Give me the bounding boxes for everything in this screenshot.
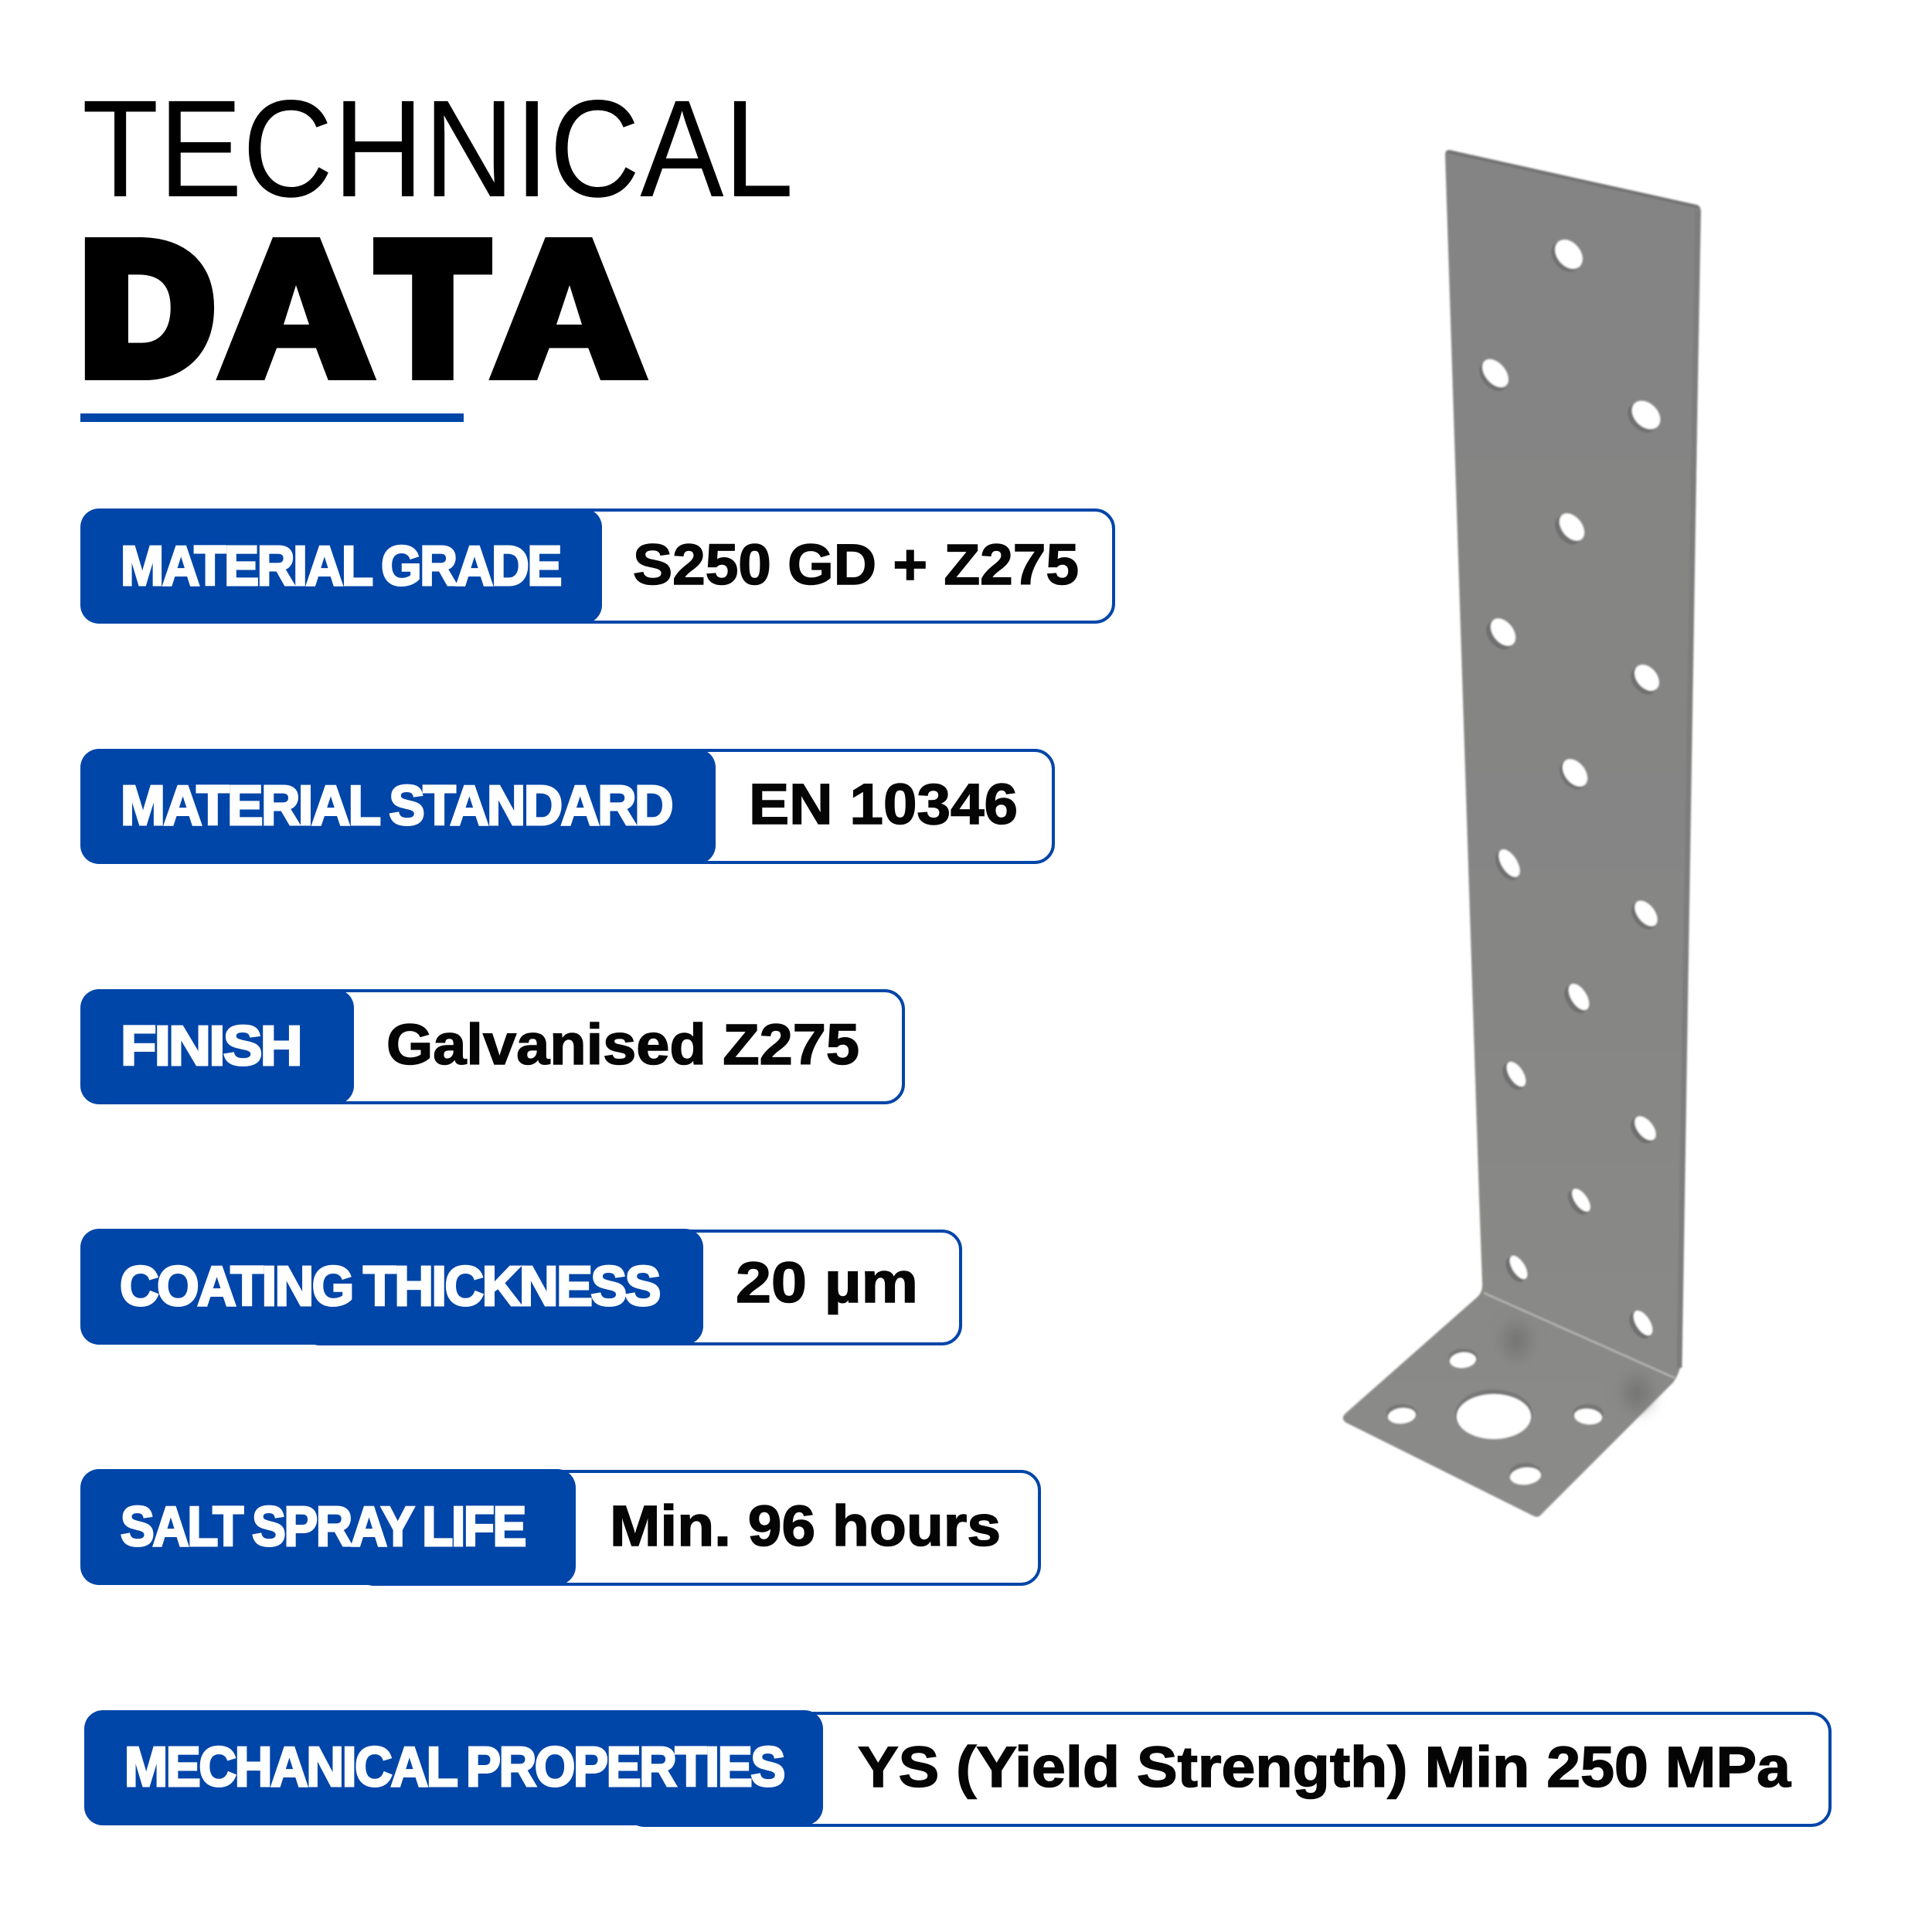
row: mechanical properties — [84, 1710, 1830, 1825]
hole shadows on foot — [1386, 1349, 1604, 1483]
holes on foot — [1387, 1351, 1603, 1486]
label text: FINISH — [121, 1015, 301, 1077]
row: material grade — [80, 509, 1114, 624]
value outline — [665, 750, 1053, 862]
holes on vertical plate — [1478, 234, 1665, 1338]
label text: MECHANICAL PROPERTIES — [124, 1736, 784, 1798]
title: TECHNICAL: TECHNICAL — [82, 71, 794, 226]
right edge shading — [1679, 210, 1698, 1368]
value outline — [301, 1231, 961, 1344]
value text: EN 10346 — [749, 772, 1018, 836]
label pill — [80, 989, 354, 1104]
bend crease — [1484, 1293, 1675, 1378]
title: DATA — [85, 237, 649, 380]
value outline — [541, 510, 1114, 622]
label pill — [80, 509, 602, 624]
label text: MATERIAL GRADE — [121, 536, 560, 597]
label text: SALT SPRAY LIFE — [121, 1496, 525, 1558]
value text: S250 GD + Z275 — [633, 532, 1079, 597]
product image: angle bracket — [1343, 150, 1701, 1517]
title: DATA: A — [224, 206, 369, 411]
title: DATA: T — [379, 206, 486, 411]
label pill — [84, 1710, 823, 1825]
row: coating thickness — [80, 1229, 961, 1345]
value outline — [626, 1713, 1830, 1825]
value text: Galvanised Z275 — [386, 1012, 859, 1077]
value outline — [309, 991, 903, 1103]
label pill — [80, 1469, 576, 1585]
title: DATA: D — [81, 206, 213, 411]
value text: 20 µm — [736, 1250, 918, 1315]
top edge shading — [1447, 151, 1699, 207]
hole shadows on vertical plate — [1474, 236, 1662, 1342]
label pill — [80, 1229, 703, 1345]
title: DATA: A — [497, 206, 641, 411]
title underline — [80, 413, 464, 422]
smudges on foot — [1504, 1324, 1649, 1410]
value text: YS (Yield Strength) Min 250 MPa — [858, 1735, 1791, 1799]
value text: Min. 96 hours — [610, 1494, 1001, 1558]
row: salt spray life — [80, 1469, 1039, 1585]
label pill — [80, 749, 716, 864]
value outline — [355, 1471, 1039, 1584]
row: material standard — [80, 749, 1053, 864]
label text: COATING THICKNESS — [120, 1256, 659, 1318]
label text: MATERIAL STANDARD — [121, 775, 672, 837]
bracket body — [1343, 150, 1701, 1517]
row: finish — [80, 989, 903, 1104]
